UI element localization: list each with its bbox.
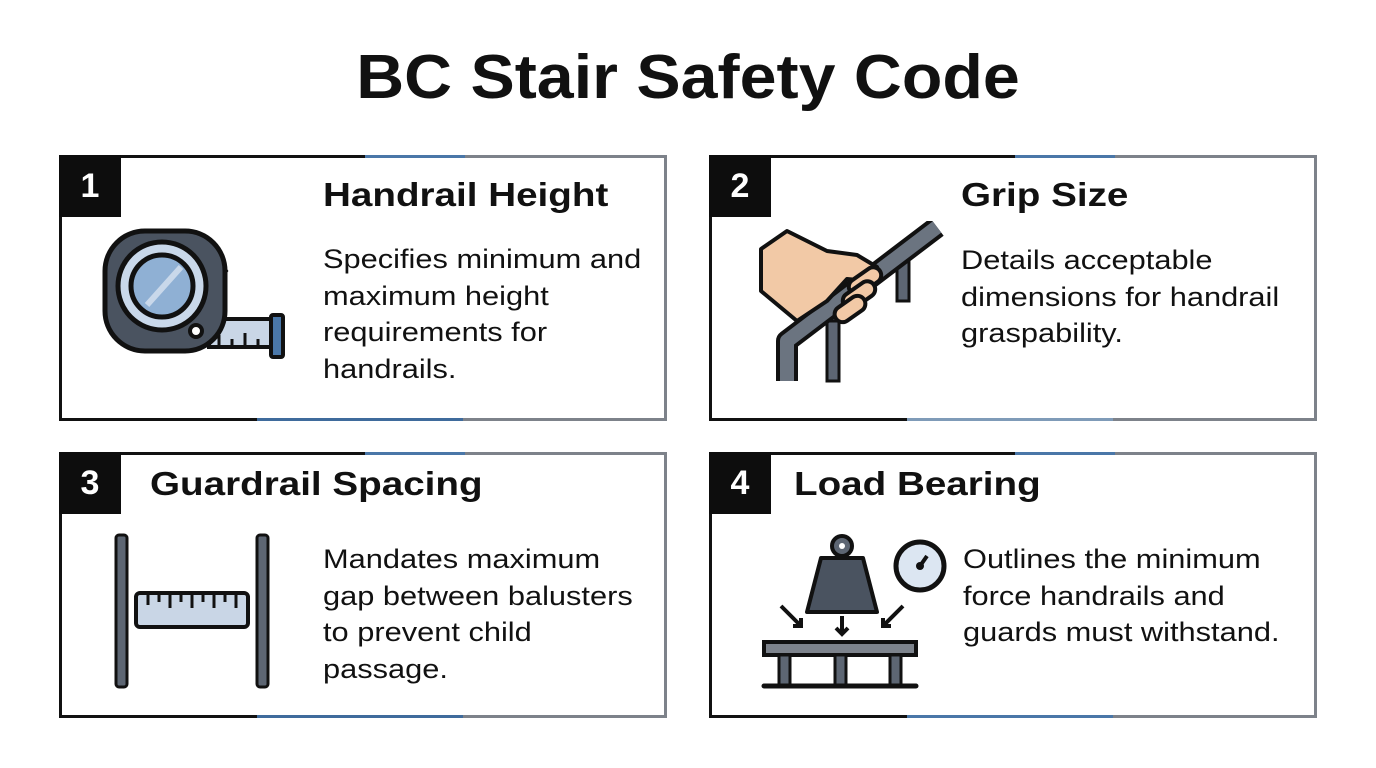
body text: Outlines the minimum	[963, 544, 1261, 574]
panel: guardrail spacing	[59, 452, 667, 718]
body text: dimensions for handrail	[961, 282, 1279, 312]
number badge	[709, 452, 771, 514]
heading: Load Bearing	[794, 465, 1041, 502]
body text: Specifies minimum and	[323, 244, 641, 274]
icon: tape measure	[102, 228, 285, 359]
body text	[961, 245, 1279, 348]
icon: hand gripping rail	[759, 221, 944, 382]
number badge	[59, 452, 121, 514]
number badge	[709, 155, 771, 217]
number badge: 4	[731, 464, 749, 502]
body text: handrails.	[323, 354, 456, 384]
number badge: 2	[731, 167, 749, 205]
body text: force handrails and	[963, 580, 1225, 610]
heading: Guardrail Spacing	[150, 465, 483, 502]
body text	[323, 544, 633, 684]
number badge	[59, 155, 121, 217]
number badge: 1	[81, 167, 99, 205]
panel: load bearing	[709, 452, 1317, 718]
title: BC Stair Safety Code	[356, 43, 1020, 112]
body text: passage.	[323, 654, 448, 684]
icon: weight, gauge, rail	[762, 534, 946, 688]
body text: gap between balusters	[323, 580, 633, 610]
body text: maximum height	[323, 280, 549, 310]
icon: balusters with ruler	[114, 534, 270, 688]
number badge: 3	[81, 464, 99, 502]
body text	[323, 244, 641, 384]
body text: Mandates maximum	[323, 544, 600, 574]
body text: Details acceptable	[961, 245, 1213, 275]
body text: to prevent child	[323, 617, 532, 647]
body text: guards must withstand.	[963, 617, 1280, 647]
body text: requirements for	[323, 317, 547, 347]
panel: handrail height	[59, 155, 667, 421]
panel: grip size	[709, 155, 1317, 421]
body text	[963, 544, 1280, 647]
heading: Grip Size	[961, 176, 1128, 213]
body text: graspability.	[961, 318, 1123, 348]
heading: Handrail Height	[323, 176, 608, 213]
